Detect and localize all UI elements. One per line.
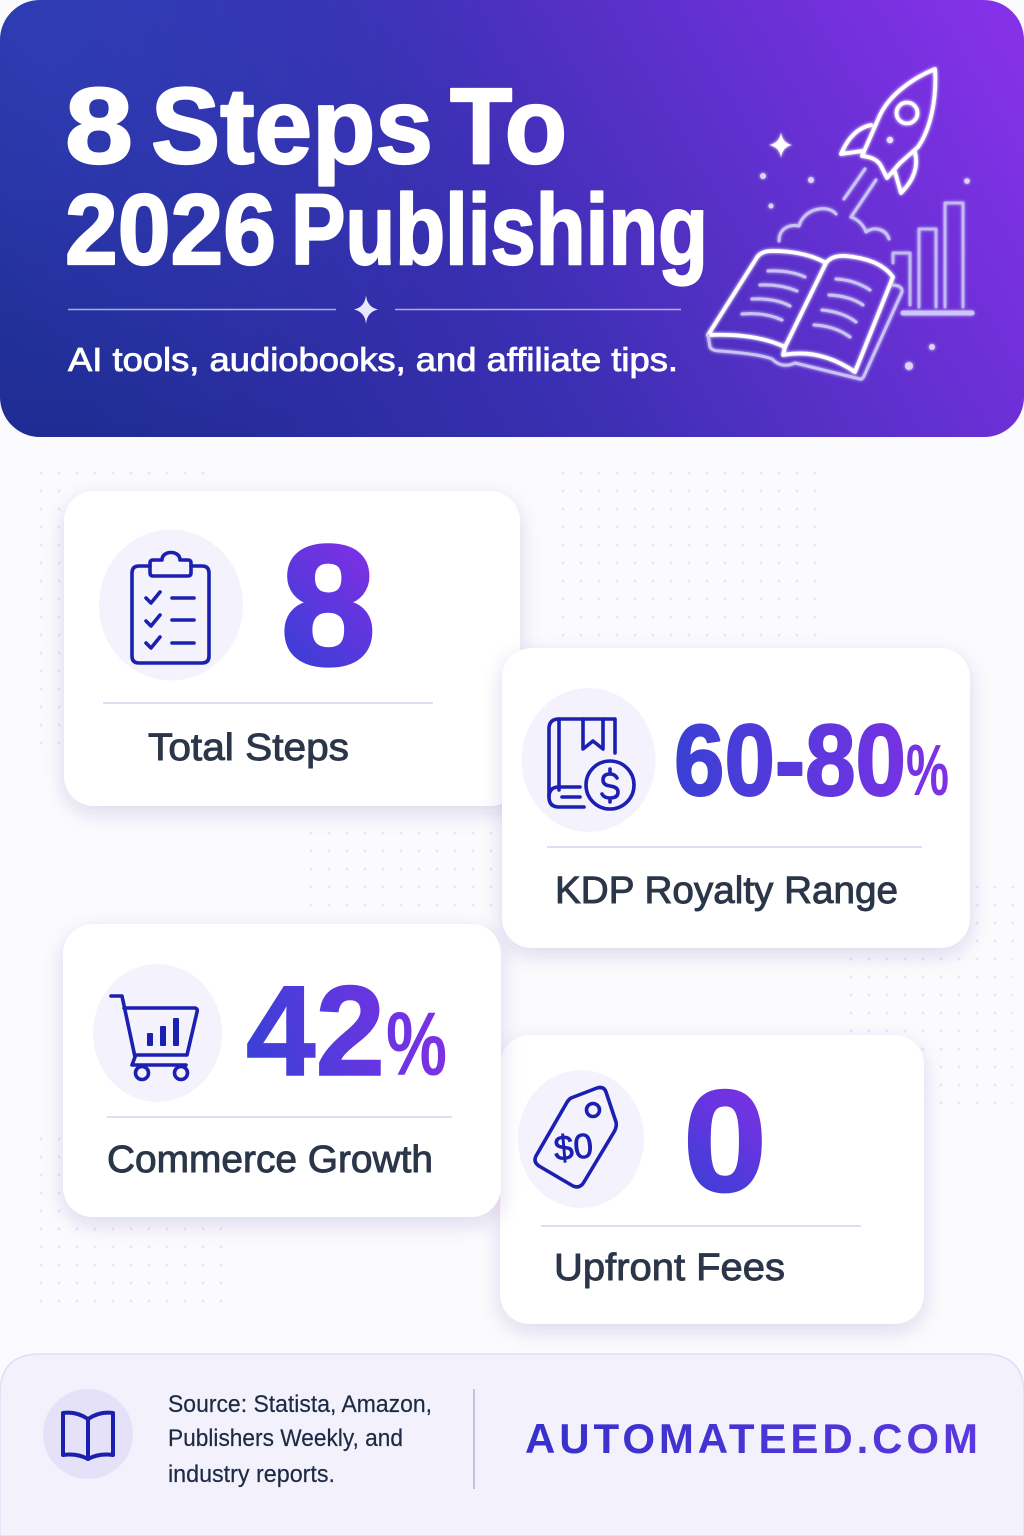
card: commerce growth: [63, 924, 501, 1217]
title: Steps: [151, 65, 433, 186]
title: Publishing: [291, 174, 708, 286]
stat value: 60-80%: 60-80: [674, 705, 906, 817]
icon circle: open book: [43, 1389, 133, 1479]
background dot patterns: [28, 458, 1014, 1314]
source text: industry reports.: [168, 1461, 335, 1488]
stat value: 8: 8: [281, 511, 376, 701]
icon text: $0: $0: [552, 1126, 595, 1169]
card: upfront fees: [500, 1035, 924, 1324]
label: KDP royalty range: KDP Royalty Range: [555, 870, 898, 912]
title: 8: [65, 65, 133, 186]
stat value: 0: 0: [683, 1060, 767, 1222]
icon circle: clipboard: [99, 530, 243, 680]
subtitle: AI tools, audiobooks, and affiliate tips.: [68, 341, 678, 378]
icon: exhaust and cloud: [779, 169, 889, 241]
icon circle: book with dollar: [522, 688, 656, 832]
icon circle: price tag: [518, 1070, 644, 1208]
stat value: 42%: %: [386, 995, 447, 1095]
title: 2026: [65, 174, 276, 286]
source text: [168, 1391, 432, 1488]
icon: rocket: [841, 69, 935, 193]
label: total steps: Total Steps: [148, 727, 349, 769]
label: commerce growth: Commerce Growth: [107, 1139, 433, 1181]
stat value: 42%: 42: [246, 960, 385, 1103]
card: total steps: [64, 491, 520, 806]
icon circle: shopping cart: [93, 964, 222, 1102]
stat value: 60-80%: %: [906, 731, 949, 811]
icon: rocket launching from open book: [708, 69, 972, 379]
icon: open book: [708, 251, 902, 379]
label: upfront fees: Upfront Fees: [554, 1247, 785, 1289]
icon: bar chart: [893, 203, 972, 313]
footer panel: [0, 1354, 1024, 1536]
brand: automateed.com: AUTOMATEED.COM: [525, 1415, 978, 1462]
sparkles and dots: [760, 132, 970, 370]
title: To: [450, 65, 567, 186]
source text: Source: Statista, Amazon,: [168, 1391, 432, 1418]
title: [65, 65, 708, 286]
card: KDP royalty range: [502, 648, 970, 948]
header banner: [0, 0, 1024, 437]
header divider with star: [68, 295, 681, 324]
source text: Publishers Weekly, and: [168, 1425, 403, 1452]
